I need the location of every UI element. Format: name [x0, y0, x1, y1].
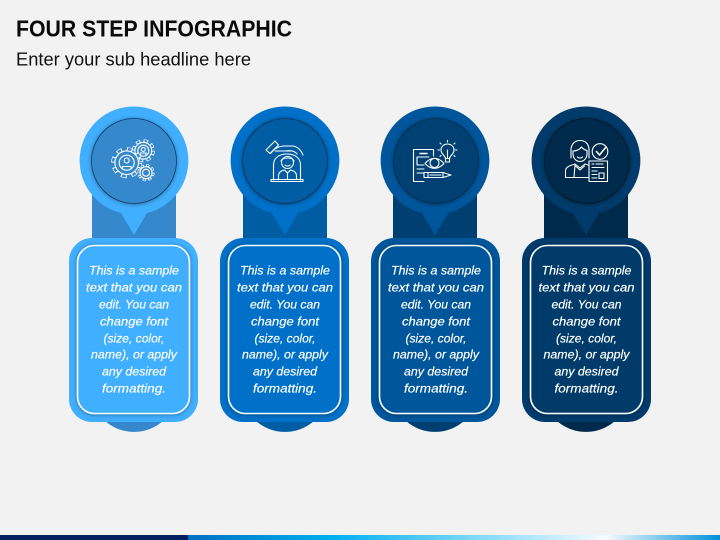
card text: any desired — [102, 364, 167, 378]
card text — [388, 264, 484, 396]
card text: any desired — [253, 364, 318, 378]
panel: step 1 — [69, 106, 198, 432]
text card — [371, 238, 500, 422]
card text — [237, 264, 333, 396]
title: FOUR STEP INFOGRAPHIC — [16, 16, 292, 42]
card text: change font — [402, 314, 471, 328]
text card — [522, 238, 651, 422]
card text: text that you can — [388, 280, 484, 294]
card text: This is a sample — [89, 264, 179, 278]
card text: edit. You can — [250, 298, 320, 312]
subtitle: Enter your sub headline here — [16, 50, 251, 70]
card text: any desired — [404, 364, 469, 378]
card text: change font — [251, 314, 320, 328]
inner circle — [394, 118, 478, 204]
pin circle — [231, 106, 339, 235]
card text: (size, color, — [254, 332, 316, 346]
inner circle — [544, 118, 630, 204]
icon: gears with people — [113, 141, 153, 180]
card text: formatting. — [404, 382, 468, 396]
back column — [243, 170, 327, 432]
card text: change font — [100, 314, 169, 328]
card text: formatting. — [253, 382, 317, 396]
card text — [86, 264, 182, 396]
icon: hand over person under dome — [266, 141, 303, 182]
card text: any desired — [554, 364, 620, 378]
card text: formatting. — [554, 382, 618, 396]
back column — [393, 170, 477, 432]
inner circle — [92, 118, 176, 204]
panel: step 2 — [220, 106, 349, 432]
card text: change font — [552, 314, 621, 328]
pin circle — [381, 106, 489, 235]
card text: This is a sample — [391, 264, 481, 278]
icon: document, eye, bulb, pencil — [414, 140, 457, 182]
card text: formatting. — [102, 382, 166, 396]
card text: This is a sample — [542, 264, 632, 278]
text card — [69, 238, 198, 422]
card text — [538, 264, 635, 396]
card text: edit. You can — [552, 298, 622, 312]
card text: name), or apply — [242, 348, 329, 362]
card text: (size, color, — [556, 332, 617, 346]
card text: name), or apply — [91, 348, 178, 362]
back column — [544, 170, 628, 432]
footer bar — [0, 535, 720, 540]
card text: This is a sample — [240, 264, 330, 278]
card text: text that you can — [237, 280, 333, 294]
card text: edit. You can — [401, 298, 471, 312]
panel: step 4 — [522, 106, 651, 432]
card text: name), or apply — [393, 348, 480, 362]
card text: text that you can — [86, 280, 182, 294]
back column — [92, 170, 176, 432]
pin circle — [532, 106, 640, 235]
card text: text that you can — [538, 280, 635, 294]
card text: (size, color, — [104, 332, 164, 346]
card text: name), or apply — [544, 348, 630, 362]
card text: edit. You can — [99, 298, 169, 312]
text card — [220, 238, 349, 422]
pin circle — [80, 106, 188, 235]
inner circle — [242, 118, 328, 204]
card text: (size, color, — [406, 332, 466, 346]
icon: person with checklist document — [566, 140, 608, 182]
panel: step 3 — [371, 106, 500, 432]
